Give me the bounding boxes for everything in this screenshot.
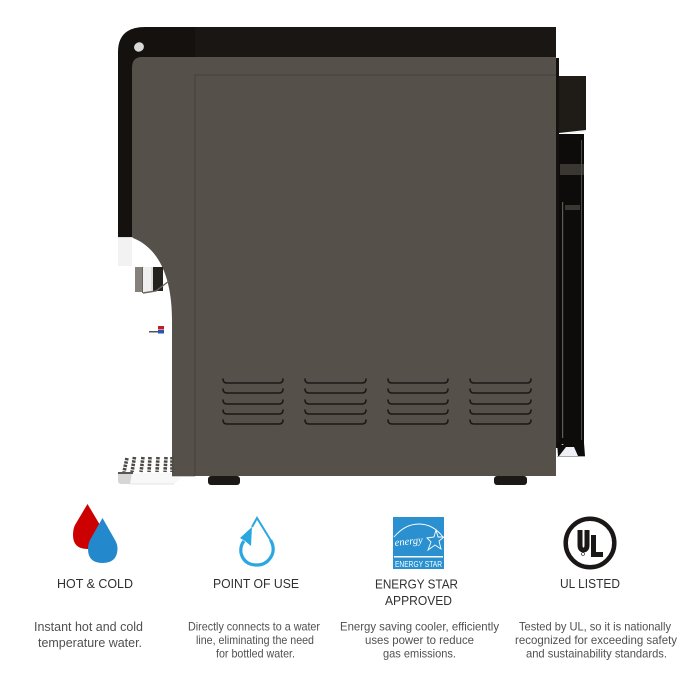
ventilation louvers — [223, 379, 531, 424]
text: energy star description: Energy saving cooler, efficiently — [340, 620, 499, 634]
icon: energy star logo: ENERGY STAR — [395, 560, 442, 569]
heading: energy star approved: ENERGY STAR — [375, 576, 458, 592]
icon: UL listed logo — [566, 519, 614, 567]
text: hot and cold description: Instant hot and cold — [34, 620, 143, 634]
door panel seam — [195, 75, 556, 476]
dispenser faucet — [135, 267, 169, 293]
icon: hot and cold drops — [73, 504, 118, 563]
hot and cold indicator — [149, 326, 164, 334]
text: UL description: recognized for exceeding safety — [515, 633, 677, 647]
heading: energy star approved — [375, 576, 458, 608]
heading: energy star approved: APPROVED — [385, 593, 452, 608]
text: hot and cold description — [34, 620, 143, 650]
heading: hot and cold: HOT & COLD — [57, 576, 133, 591]
icon: energy star logo — [393, 517, 444, 569]
text: point of use description: Directly connects to a water — [188, 620, 320, 634]
heading: UL listed: UL LISTED — [560, 576, 620, 591]
rear black module — [555, 58, 586, 457]
product: water cooler side view — [118, 27, 586, 485]
icon: point of use drop — [240, 518, 273, 565]
drip tray — [118, 457, 195, 484]
text: UL description: Tested by UL, so it is nationally — [519, 620, 671, 634]
heading: point of use: POINT OF USE — [213, 576, 299, 591]
white front fascia — [118, 237, 132, 266]
top shading band — [195, 27, 556, 57]
text: point of use description: for bottled water. — [216, 646, 295, 660]
text: UL description: and sustainability standards. — [526, 646, 667, 660]
text: energy star description — [340, 620, 499, 660]
text: energy star description: gas emissions. — [383, 646, 456, 660]
grey side panel — [132, 57, 556, 476]
text: point of use description — [188, 620, 320, 660]
text: hot and cold description: temperature water. — [38, 636, 142, 650]
icon: energy star logo: energy — [394, 535, 424, 549]
black top shell and front strip — [118, 27, 556, 237]
text: energy star description: uses power to reduce — [365, 633, 474, 647]
feet — [208, 476, 527, 485]
text: UL description — [515, 620, 677, 660]
text: point of use description: line, eliminating the need — [196, 633, 314, 647]
sensor dot — [133, 41, 145, 53]
